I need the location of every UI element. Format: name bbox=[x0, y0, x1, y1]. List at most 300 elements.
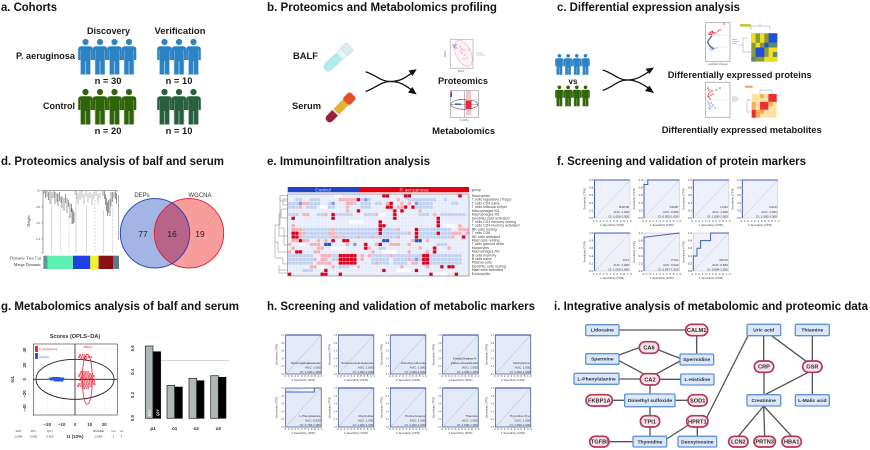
ROC: APOD: 1.0 bbox=[688, 231, 692, 235]
node: L-Histidine bbox=[681, 374, 714, 385]
labels: immune cell types: Macrophages M0 bbox=[472, 250, 499, 254]
ROC: metabolite 4: 0.0 0.2 0.4 0.6 0.8 1.0 bbox=[441, 374, 480, 378]
labels: immune cell types: Dendritic cells activated bbox=[472, 216, 509, 220]
ROC: LCN2: CI: 1.000-1.000 bbox=[707, 214, 728, 218]
ROC: metabolite 5: 0.4 bbox=[491, 358, 495, 360]
chart: protein heatmap bbox=[738, 23, 777, 62]
ROC: metabolite 3: 0.6 bbox=[386, 351, 390, 353]
node: Uric acid: Uric acid bbox=[753, 327, 774, 333]
ROC: Thiamine: CI: 1.000-1.000 bbox=[457, 423, 478, 427]
chart: immune cell heatmap bbox=[288, 194, 469, 276]
ROC: Thiamine: 1-Specificity (FPR) bbox=[448, 431, 472, 435]
ROC: Morpholine: 0.0 bbox=[334, 427, 338, 429]
OPLS-DA model statistics: 0.926 bbox=[46, 434, 54, 438]
ROC: TPI1: 0.8 bbox=[589, 239, 594, 243]
ROC: Thymidine bbox=[484, 388, 532, 435]
chart: OPLS-DA score plot: 0 bbox=[74, 422, 77, 427]
ROC: L-Phenylalanine: Sensitivity (TPR) bbox=[275, 397, 279, 418]
ROC: RAP1B: 0.6 bbox=[589, 193, 594, 197]
label: Serum: Serum bbox=[292, 100, 321, 111]
ROC: metabolite 4: 1.0 bbox=[438, 335, 442, 337]
heading f: f. Screening and validation of protein markers bbox=[557, 154, 806, 168]
ROC: LCN2: 0.8 bbox=[688, 186, 692, 190]
OPLS-DA model statistics: RMSEE bbox=[93, 429, 104, 433]
ROC: metabolite 2: CI: 1.000-1.000 bbox=[353, 370, 374, 374]
ROC: CALR: 0.6 bbox=[737, 193, 741, 197]
ROC: L-Phenylalanine bbox=[275, 388, 323, 435]
OPLS-DA model statistics: 3 bbox=[121, 434, 123, 438]
panel: d. Proteomics analysis of balf and serum bbox=[1, 154, 224, 269]
ROC: RAP1B: CI: 1.000-1.000 bbox=[608, 214, 629, 218]
ROC: RAP1B: RAP1B bbox=[619, 205, 629, 209]
ROC: Thymidine: AUC: 1.000 bbox=[515, 418, 531, 422]
ROC: CALR: 0.0 bbox=[737, 216, 741, 220]
ROC: L-Phenylalanine: 0.0 bbox=[281, 427, 285, 429]
chart: module colour bars bbox=[43, 256, 119, 269]
labels: immune cell types: T cells follicular helper bbox=[472, 205, 508, 209]
ROC: Thymidine: CI: 1.000-1.000 bbox=[510, 423, 531, 427]
icon: control verification people bbox=[157, 89, 201, 124]
chart: Venn diagram: 16 bbox=[167, 229, 177, 239]
node: L-Malic acid bbox=[795, 395, 829, 406]
ROC: TPI1: 1.0 bbox=[589, 231, 594, 235]
ROC: Thiamine: 1.0 bbox=[438, 388, 442, 390]
heading h: h. Screening and validation of metabolic markers bbox=[267, 299, 535, 313]
chart: OPLS-DA score plot: 20 bbox=[22, 362, 27, 367]
ROC: APOD: AUC: 0.840 bbox=[712, 263, 728, 267]
ROC: metabolite 1: 0.0 bbox=[281, 374, 285, 376]
chart: permutation bars: o2 bbox=[194, 426, 199, 431]
ROC: S100P: AUC: 0.980 bbox=[663, 210, 679, 214]
heading c: c. Differential expression analysis bbox=[557, 0, 740, 14]
panel: a. Cohorts bbox=[1, 0, 206, 136]
ROC: L-Phenylalanine: 0.2 bbox=[281, 419, 285, 421]
labels: immune cell types: Macrophages M2 bbox=[472, 213, 499, 217]
sample counts bbox=[95, 75, 192, 136]
panel: e. Immunoinfiltration analysis bbox=[267, 154, 520, 276]
ROC: Thiamine: Sensitivity (TPR) bbox=[432, 397, 436, 418]
ROC: Thymidine: 0.2 bbox=[491, 419, 495, 421]
group annotation bar: Control bbox=[315, 187, 331, 193]
ROC: metabolite 1: Sensitivity (TPR) bbox=[275, 344, 279, 365]
ROC: metabolite 3: Sensitivity (TPR) bbox=[379, 344, 383, 365]
labels: immune cell types: B cells memory bbox=[472, 253, 496, 257]
ROC: ITIH4: 0.8 bbox=[639, 239, 643, 243]
ROC: metabolite 1: CI: 1.000-1.000 bbox=[300, 370, 321, 374]
label: Differentially expressed proteins: Differentially expressed proteins bbox=[668, 69, 812, 80]
ROC: Proline betaine: 0.2 bbox=[386, 419, 390, 421]
ROC: Morpholine bbox=[327, 388, 375, 435]
ROC: CALR: 0.4 bbox=[737, 201, 741, 205]
node: L-Malic acid: L-Malic acid bbox=[798, 398, 827, 404]
labels: immune cell types: Mast cells resting bbox=[472, 238, 499, 242]
ROC: Morpholine: 0.0 0.2 0.4 0.6 0.8 1.0 bbox=[337, 427, 375, 431]
arrow: crossing arrows to omics bbox=[366, 69, 417, 94]
legend: metabolite heatmap colour bar bbox=[745, 86, 753, 88]
ROC: Proline betaine: CI: 1.000-1.000 bbox=[405, 423, 426, 427]
ROC: Thiamine: 0.4 bbox=[438, 411, 442, 413]
ROC: TPI1: 0.0 0.2 0.4 0.6 0.8 1.0 bbox=[593, 272, 632, 276]
OPLS-DA model statistics: pre bbox=[111, 429, 116, 433]
ROC: TPI1: 0.4 bbox=[589, 254, 594, 258]
chart: OPLS-DA score plot: −40 bbox=[22, 404, 27, 412]
ROC: ITIH4: Sensitivity (TPR) bbox=[632, 241, 636, 263]
ROC: metabolite 5 bbox=[484, 335, 532, 382]
ROC: Proline betaine: 0.8 bbox=[386, 396, 390, 398]
label: BALF: BALF bbox=[293, 50, 318, 61]
ROC: metabolite 1: N-(2-Furoyl)-D-glucosamine bbox=[291, 361, 321, 365]
ROC: Thiamine: 0.0 0.2 0.4 0.6 0.8 1.0 bbox=[441, 427, 480, 431]
chart: OPLS-DA score plot: 0 bbox=[22, 378, 27, 381]
node: CA6 bbox=[639, 342, 659, 353]
ROC: Thiamine: Thiamine bbox=[465, 414, 478, 418]
OPLS-DA model statistics: 0.396 bbox=[15, 434, 23, 438]
ROC: Proline betaine: AUC: 1.000 bbox=[410, 418, 426, 422]
ROC: metabolite 3: 0.2 bbox=[386, 366, 390, 368]
ROC: RAP1B: 1.0 bbox=[589, 178, 594, 182]
ROC: metabolite 1 bbox=[275, 335, 323, 382]
ROC: metabolite 2: 0.2 bbox=[334, 366, 338, 368]
ROC: metabolite 5: 0.0 0.2 0.4 0.6 0.8 1.0 bbox=[494, 374, 532, 378]
ROC: CALR: Sensitivity (TPR) bbox=[730, 188, 734, 210]
ROC: metabolite 2: Sensitivity (TPR) bbox=[327, 344, 331, 365]
ROC: S100P: S100P bbox=[669, 205, 678, 209]
row dendrogram bbox=[275, 196, 288, 273]
thumbnail: metabolomics OPLS-DA: t1 (10%) bbox=[460, 119, 469, 122]
node: CA2 bbox=[640, 374, 660, 385]
icon: control discovery people bbox=[78, 89, 136, 124]
ROC: LCN2: 0.0 0.2 0.4 0.6 0.8 1.0 bbox=[691, 219, 731, 223]
ROC: TPI1: TPI1 bbox=[623, 258, 629, 262]
ROC: LCN2: 1.0 bbox=[688, 178, 692, 182]
chart: OPLS-DA score plot: −20 bbox=[22, 390, 27, 398]
ROC: LCN2: 1-Specificity (FPR) bbox=[699, 223, 723, 227]
ROC: Thiamine bbox=[432, 388, 480, 435]
column label: Verification: Verification bbox=[154, 25, 206, 36]
ROC: S100P: 1.0 bbox=[639, 178, 643, 182]
chart: OPLS-DA score plot: P. aeruginosa bbox=[39, 347, 57, 351]
ROC: L-Phenylalanine: 0.8 bbox=[281, 396, 285, 398]
ROC: metabolite 5: 0.8 bbox=[491, 343, 495, 345]
ROC: Morpholine: 0.2 bbox=[334, 419, 338, 421]
chart: Venn diagram: 19 bbox=[195, 229, 205, 239]
node: FKBP1A bbox=[586, 395, 612, 406]
ROC: CALR: 0.8 bbox=[737, 186, 741, 190]
sample counts: n = 20 bbox=[95, 125, 121, 136]
ROC: metabolite 4: 0.4 bbox=[438, 358, 442, 360]
group annotation bar bbox=[288, 187, 481, 193]
node: CALM1: CALM1 bbox=[687, 328, 706, 334]
ROC: Thymidine: 1-Specificity (FPR) bbox=[501, 431, 525, 435]
chart: OPLS-DA score plot: −20 bbox=[44, 422, 52, 427]
ROC: metabolite 5: 0.2 bbox=[491, 366, 495, 368]
labels: immune cell types: Plasma cells bbox=[472, 261, 492, 265]
ROC: APOD bbox=[681, 231, 731, 280]
ROC: Proline betaine: 0.0 bbox=[386, 427, 390, 429]
ROC: LCN2: LCN2 bbox=[720, 205, 728, 209]
node: SOD1: SOD1 bbox=[690, 398, 705, 404]
chart: OPLS-DA score plot bbox=[10, 334, 117, 439]
labels: immune cell types: T cells CD4 memory activated bbox=[472, 224, 520, 228]
OPLS-DA model statistics: 0.084 bbox=[95, 434, 103, 438]
labels: module rows: Merge Dynamic bbox=[14, 262, 41, 267]
ROC: S100P: 0.2 bbox=[639, 208, 643, 212]
ROC: L-Phenylalanine: 0.4 bbox=[281, 411, 285, 413]
labels: immune cell types: B cells naive bbox=[472, 257, 492, 261]
icon: patient group bbox=[555, 54, 590, 75]
chart: OPLS-DA score plot: to1 bbox=[10, 375, 15, 383]
ROC: metabolite 4: 0.6 bbox=[438, 351, 442, 353]
ROC: RAP1B: 0.0 bbox=[589, 216, 594, 220]
ROC: Morpholine: CI: 1.000-1.000 bbox=[353, 423, 374, 427]
chart: metabolite heatmap bbox=[747, 90, 777, 118]
ROC: APOD: 0.2 bbox=[688, 261, 692, 265]
labels: immune cell types bbox=[472, 194, 520, 276]
ROC: ITIH4: AUC: 0.940 bbox=[663, 263, 679, 267]
ROC: APOD: 1-Specificity (FPR) bbox=[699, 276, 723, 280]
row label: Control: Control bbox=[43, 100, 75, 111]
chart: Venn diagram bbox=[120, 193, 224, 268]
icon: BALF tube bbox=[321, 42, 354, 74]
ROC: RAP1B: 0.2 bbox=[589, 208, 594, 212]
ROC: CALR: CI: 1.000-1.000 bbox=[756, 214, 777, 218]
ROC: metabolite 3: 0.0 bbox=[386, 374, 390, 376]
ROC: S100P: CI: 0.952-1.000 bbox=[658, 214, 679, 218]
ROC: LCN2: AUC: 1.000 bbox=[712, 210, 728, 214]
row label: P. aeruginosa: P. aeruginosa bbox=[16, 50, 76, 61]
ROC: metabolite 3: 0.8 bbox=[386, 343, 390, 345]
label: Differentially expressed metabolites: Differentially expressed metabolites bbox=[662, 124, 822, 135]
ROC: metabolite 2: 1-Specificity (FPR) bbox=[344, 378, 368, 382]
ROC: L-Phenylalanine: 0.0 0.2 0.4 0.6 0.8 1.0 bbox=[284, 427, 323, 431]
ROC: CALR bbox=[730, 178, 780, 227]
chart: WGCNA dendrogram: 0.8 bbox=[36, 205, 41, 209]
ROC: metabolite 4: 0.0 bbox=[438, 374, 442, 376]
ROC: RAP1B: 0.0 0.2 0.4 0.6 0.8 1.0 bbox=[593, 219, 632, 223]
chart: OPLS-DA score plot: Scores (OPLS−DA) bbox=[50, 334, 100, 340]
ROC: RAP1B bbox=[582, 178, 632, 227]
ROC: metabolite 1: 0.0 0.2 0.4 0.6 0.8 1.0 bbox=[284, 374, 323, 378]
node: CALM1 bbox=[686, 324, 708, 336]
ROC: metabolite 2: 1.0 bbox=[334, 335, 338, 337]
node: FKBP1A: FKBP1A bbox=[588, 398, 611, 404]
ROC: metabolite 1: 0.8 bbox=[281, 343, 285, 345]
ROC: S100P bbox=[632, 178, 682, 227]
node: Creatinine bbox=[747, 395, 781, 406]
thumbnail: proteomics PCA: PC1 bbox=[458, 69, 464, 73]
node: TPI1: TPI1 bbox=[644, 419, 656, 425]
ROC: Thymidine: Thymidine 3'(+) bbox=[510, 414, 530, 418]
heading d: d. Proteomics analysis of balf and serum bbox=[1, 154, 224, 168]
ROC: Thiamine: AUC: 1.000 bbox=[462, 418, 478, 422]
ROC: APOD: 0.0 bbox=[688, 269, 692, 273]
chart: permutation bars: 0.4 bbox=[130, 368, 135, 375]
column label: Discovery: Discovery bbox=[87, 25, 131, 36]
ROC: metabolite 2: 0.0 bbox=[334, 374, 338, 376]
ROC: metabolite 2: Methylbeta-2-acetamidoglucoside bbox=[341, 361, 374, 365]
ROC: metabolite 4: 0.2 bbox=[438, 366, 442, 368]
node: GSR bbox=[803, 361, 822, 372]
ROC: APOD: 0.8 bbox=[688, 239, 692, 243]
chart: permutation bars bbox=[130, 345, 229, 431]
ROC: ITIH4: 0.0 bbox=[639, 269, 643, 273]
ROC: CALR: 1.0 bbox=[737, 178, 741, 182]
ROC: metabolite 5: 0.6 bbox=[491, 351, 495, 353]
ROC: Morpholine: 0.8 bbox=[334, 396, 338, 398]
node: L-Phenylalanine: L-Phenylalanine bbox=[578, 377, 616, 383]
node: Thymidine: Thymidine bbox=[638, 439, 663, 445]
ROC: RAP1B: AUC: 1.000 bbox=[613, 210, 629, 214]
node: Thiamine: Thiamine bbox=[801, 327, 823, 333]
ROC: TPI1: 0.0 bbox=[589, 269, 594, 273]
ROC: Morpholine: 1-Specificity (FPR) bbox=[344, 431, 368, 435]
icon: P. aeruginosa discovery people bbox=[78, 39, 136, 74]
ROC: ITIH4: 0.4 bbox=[639, 254, 643, 258]
ROC: RAP1B: 1-Specificity (FPR) bbox=[600, 223, 624, 227]
ROC: LCN2: 0.6 bbox=[688, 193, 692, 197]
chart: WGCNA dendrogram bbox=[26, 188, 118, 253]
ROC: metabolite 1: 0.2 bbox=[281, 366, 285, 368]
chart: WGCNA dendrogram: 0.4 bbox=[36, 237, 41, 241]
ROC: L-Phenylalanine: CI: 0.763-1.000 bbox=[300, 423, 321, 427]
ROC: APOD: 0.6 bbox=[688, 246, 692, 250]
ROC: APOD: APOD bbox=[719, 258, 729, 262]
labels: immune cell types: NK cells activated bbox=[472, 235, 500, 239]
node: Creatinine: Creatinine bbox=[751, 398, 776, 404]
ROC: metabolite 3: AUC: 1.000 bbox=[410, 366, 426, 370]
chart: permutation bars: 0.2 bbox=[130, 391, 135, 398]
labels: module rows bbox=[10, 256, 42, 267]
chart: OPLS-DA score plot: −10 bbox=[58, 422, 66, 427]
ROC: Thymidine: Sensitivity (TPR) bbox=[484, 397, 488, 418]
node: Lidocaine: Lidocaine bbox=[591, 328, 614, 334]
thumbnail: proteomics PCA: PC2 bbox=[443, 51, 447, 57]
ROC: ITIH4: 1-Specificity (FPR) bbox=[650, 276, 674, 280]
ROC: metabolite 4: 0.8 bbox=[438, 343, 442, 345]
ROC: metabolite 2 bbox=[327, 335, 375, 382]
ROC: Thiamine: 0.2 bbox=[438, 419, 442, 421]
node: Thiamine bbox=[795, 324, 829, 336]
node: LCN2 bbox=[729, 436, 748, 447]
ROC: CALR: CALR bbox=[769, 205, 778, 209]
ROC: APOD: Sensitivity (TPR) bbox=[681, 241, 685, 263]
ROC: ITIH4: 0.6 bbox=[639, 246, 643, 250]
sample counts: n = 30 bbox=[95, 75, 121, 86]
ROC: RAP1B: 0.8 bbox=[589, 186, 594, 190]
ROC: CALR: 1-Specificity (FPR) bbox=[748, 223, 772, 227]
icon: P. aeruginosa verification people bbox=[157, 39, 201, 74]
thumbnail: proteomics PCA bbox=[443, 37, 485, 73]
labels: immune cell types: T cells CD4 memory resting bbox=[472, 220, 516, 224]
node: SOD1 bbox=[688, 395, 707, 406]
node: CA2: CA2 bbox=[644, 377, 656, 383]
node: PRTN3: PRTN3 bbox=[755, 440, 774, 446]
ROC: TPI1: Sensitivity (TPR) bbox=[582, 241, 586, 263]
ROC: L-Phenylalanine: 0.6 bbox=[281, 404, 285, 406]
ROC: metabolite 5: 1-Specificity (FPR) bbox=[501, 378, 525, 382]
node: Lidocaine bbox=[586, 325, 619, 336]
panel: f. Screening and validation of protein markers bbox=[557, 154, 806, 280]
ROC: metabolite 5: CI: 1.000-1.000 bbox=[510, 370, 531, 374]
ROC: ITIH4 bbox=[632, 231, 682, 280]
node: CA6: CA6 bbox=[643, 345, 655, 351]
node: Spermidine bbox=[680, 354, 714, 365]
ROC: metabolite 4: Sensitivity (TPR) bbox=[432, 344, 436, 365]
ROC: L-Phenylalanine: L-Phenylalanine bbox=[299, 414, 321, 418]
labels: immune cell types: T cells gamma delta bbox=[472, 242, 504, 246]
node: Spermidine: Spermidine bbox=[683, 357, 710, 363]
chart: permutation bars: Q2Y bbox=[156, 408, 160, 416]
ROC: metabolite 1: 0.4 bbox=[281, 358, 285, 360]
ROC: S100P: 1-Specificity (FPR) bbox=[650, 223, 674, 227]
ROC: Proline betaine: Sensitivity (TPR) bbox=[379, 397, 383, 418]
ROC: metabolite 4: CI: 1.000-1.000 bbox=[457, 370, 478, 374]
ROC: TPI1: 1-Specificity (FPR) bbox=[600, 276, 624, 280]
chart: OPLS-DA score plot: t1 (10%) bbox=[67, 434, 84, 439]
icon: serum tube bbox=[323, 91, 357, 125]
ROC: S100P: 0.4 bbox=[639, 201, 643, 205]
sample counts: n = 10 bbox=[166, 125, 192, 136]
ROC: RAP1B: 0.4 bbox=[589, 201, 594, 205]
labels: immune cell types: T cells CD4 naive bbox=[472, 202, 500, 206]
node: Thymidine bbox=[633, 436, 667, 447]
ROC: metabolite 1: AUC: 1.000 bbox=[305, 366, 321, 370]
ROC: S100P: Sensitivity (TPR) bbox=[632, 188, 636, 210]
heading g: g. Metabolomics analysis of balf and serum bbox=[1, 299, 239, 313]
ROC: metabolite 2: 0.6 bbox=[334, 351, 338, 353]
heatmap frame bbox=[288, 194, 469, 276]
ROC: CALR: 0.0 0.2 0.4 0.6 0.8 1.0 bbox=[740, 219, 780, 223]
group annotation bar: group bbox=[472, 188, 481, 192]
node: Spermine: Spermine bbox=[591, 357, 614, 363]
ROC: metabolite 2: 0.4 bbox=[334, 358, 338, 360]
node: HBA1: HBA1 bbox=[784, 440, 799, 446]
panel: c. Differential expression analysis bbox=[555, 0, 822, 135]
ROC: metabolite 5: Methylamine bbox=[513, 361, 531, 365]
node: TPI1 bbox=[640, 416, 660, 427]
node: LCN2: LCN2 bbox=[731, 440, 746, 446]
ROC: LCN2: 0.2 bbox=[688, 208, 692, 212]
ROC: Thymidine: 1.0 bbox=[491, 388, 495, 390]
labels: immune cell types: T cells regulatory (Tregs) bbox=[472, 198, 511, 202]
node: PRTN3 bbox=[754, 436, 775, 447]
node: CRP: CRP bbox=[758, 365, 770, 371]
ROC: TPI1 bbox=[582, 231, 632, 280]
ROC: Morpholine: AUC: 1.000 bbox=[358, 418, 374, 422]
labels: immune cell types: Neutrophils bbox=[472, 194, 490, 198]
ROC: S100P: 0.0 bbox=[639, 216, 643, 220]
chart: protein volcano plot: Log2(Fold Change) bbox=[708, 64, 728, 66]
node: Spermine bbox=[586, 354, 619, 364]
ROC: Proline betaine: 0.4 bbox=[386, 411, 390, 413]
chart: OPLS-DA score plot: 40 bbox=[22, 347, 27, 352]
ROC: Morpholine: Sensitivity (TPR) bbox=[327, 397, 331, 418]
ROC: metabolite 5: Sensitivity (TPR) bbox=[484, 344, 488, 365]
OPLS-DA model statistics: Q2Y bbox=[47, 429, 53, 433]
chart: Venn diagram: 77 bbox=[138, 229, 148, 239]
node: CRP bbox=[754, 361, 774, 372]
chart: WGCNA dendrogram: 1.0 bbox=[36, 188, 41, 192]
node: Dimethyl sulfoxide bbox=[625, 394, 675, 407]
ROC: RAP1B: Sensitivity (TPR) bbox=[582, 188, 586, 210]
ROC: LCN2: 0.4 bbox=[688, 201, 692, 205]
node: HBA1 bbox=[782, 436, 801, 447]
ROC: Proline betaine: Proline betaine bbox=[405, 414, 426, 418]
ROC: TPI1: CI: 1.000-1.000 bbox=[608, 268, 629, 272]
ROC: metabolite 4: AUC: 1.000 bbox=[462, 366, 478, 370]
chart: WGCNA dendrogram: 0.6 bbox=[36, 221, 41, 225]
node: HPRT1: HPRT1 bbox=[688, 419, 707, 425]
